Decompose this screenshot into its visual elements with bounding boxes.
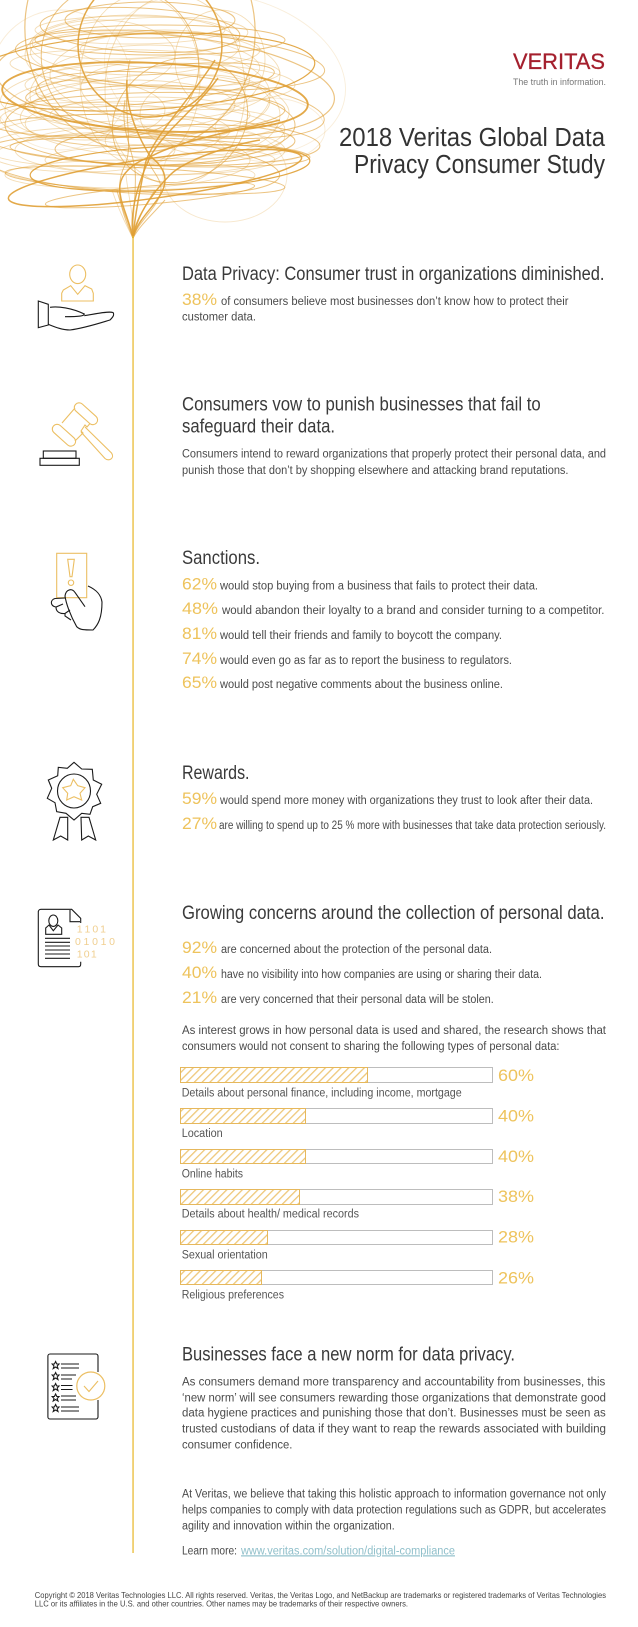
logo tagline: The truth in information. — [513, 77, 606, 87]
learn more link: Learn more: — [182, 1545, 237, 1557]
text block: data hygiene practices and punishing those that don’t. Businesses must be seen as — [182, 1408, 606, 1420]
heading: Businesses face a new norm for data privacy. — [182, 1345, 515, 1366]
panel: consumer trust — [38, 264, 605, 330]
text block: consumer confidence. — [182, 1440, 292, 1452]
text block: As consumers demand more transparency and accountability from businesses, this — [182, 1377, 606, 1389]
stat: 38%: 38% — [182, 291, 217, 309]
bar: sexual orientation 28%: Sexual orientation — [182, 1250, 268, 1262]
stat: 65% — [182, 674, 503, 692]
bar: health records 38%: 38% — [498, 1188, 534, 1206]
stat: 81%: 81% — [182, 625, 217, 643]
text block: veritas statement: agility and innovation within the organization. — [182, 1520, 395, 1532]
logo wordmark: VERITAS — [513, 49, 605, 74]
stat: 74%: 74% — [182, 650, 217, 668]
stat: 59%: would spend more money with organizations they trust to look after their data. — [219, 795, 593, 807]
icon: checklist with check badge — [48, 1354, 105, 1419]
icon: hand holding warning card — [51, 553, 102, 630]
stat: 81%: would tell their friends and family to boycott the company. — [219, 630, 502, 642]
panel: sanctions — [51, 548, 605, 692]
bar: religious preferences 26% — [180, 1270, 534, 1302]
stat: 65%: 65% — [182, 674, 217, 692]
icon: personal data document: 0 1 0 1 0 — [75, 936, 115, 948]
bar: personal finance 60% — [180, 1067, 534, 1100]
stat: 40% — [182, 964, 542, 982]
stat: 81% — [182, 625, 502, 643]
text block: veritas statement — [182, 1488, 606, 1532]
heading — [182, 395, 541, 438]
stat: 48% — [182, 600, 604, 618]
icon: personal data document — [38, 909, 115, 967]
text block — [182, 1377, 606, 1452]
stat: 27%: 27% — [182, 815, 217, 833]
heading: safeguard their data. — [182, 417, 335, 438]
panel: new norm — [48, 1345, 606, 1557]
bar: personal finance 60%: Details about personal finance, including income, mortgage — [182, 1088, 462, 1100]
tornado of tangled data lines — [0, 0, 361, 238]
title: 2018 Veritas Global Data — [339, 124, 606, 152]
stat: 48%: 48% — [182, 600, 218, 618]
stat: 92%: are concerned about the protection of the personal data. — [221, 944, 492, 956]
bar: location 40% — [180, 1108, 534, 1140]
bar: religious preferences 26%: Religious preferences — [182, 1290, 284, 1302]
stat: 40%: have no visibility into how companies are using or sharing their data. — [221, 969, 542, 981]
icon: gavel — [40, 401, 113, 465]
footer copyright — [35, 1591, 606, 1609]
icon: hand holding person — [38, 265, 114, 330]
panel: growing concerns — [38, 903, 607, 1302]
stat: 21% — [182, 989, 494, 1007]
stat: 92%: 92% — [182, 939, 217, 957]
footer copyright: Copyright © 2018 Veritas Technologies LLC. All rights reserved. Veritas, the Veritas Logo, and NetBackup are trademarks or registered trademarks of Veritas Technologies — [35, 1591, 606, 1600]
icon: personal data document: 1 1 0 1 — [77, 923, 106, 935]
stat: 38%: customer data. — [182, 312, 256, 324]
stat: 62%: 62% — [182, 575, 217, 593]
text block: ‘new norm’ will see consumers rewarding those organizations that demonstrate good — [182, 1393, 606, 1405]
stat: 92% — [182, 939, 492, 957]
icon: personal data document: 1 0 1 — [77, 948, 97, 960]
footer copyright: LLC or its affiliates in the U.S. and other countries. Other names may be trademarks of their respective owners. — [35, 1600, 408, 1609]
heading: Sanctions. — [182, 548, 260, 569]
bar: location 40%: Location — [182, 1128, 223, 1140]
bar: online habits 40% — [180, 1148, 534, 1181]
stat: 38%: of consumers believe most businesses don’t know how to protect their — [221, 296, 569, 308]
stat: 38% — [182, 291, 569, 324]
bar: location 40%: 40% — [498, 1108, 534, 1126]
stat: 21%: 21% — [182, 989, 217, 1007]
veritas logo — [513, 49, 606, 87]
stat: 62%: would stop buying from a business that fails to protect their data. — [219, 580, 538, 592]
stat: 74% — [182, 650, 512, 668]
stat: 59%: 59% — [182, 790, 217, 808]
stat: 62% — [182, 575, 538, 593]
stat: 40%: 40% — [182, 964, 217, 982]
panel: punish businesses — [40, 395, 606, 477]
stat: 65%: would post negative comments about the business online. — [219, 679, 503, 691]
text block: veritas statement: helps companies to comply with data protection regulations such as GDPR, but accelerates — [182, 1504, 606, 1516]
bar: health records 38% — [180, 1188, 534, 1221]
stat: 59% — [182, 790, 593, 808]
bar: religious preferences 26%: 26% — [498, 1270, 534, 1288]
icon: award rosette — [47, 762, 102, 840]
bar: sexual orientation 28% — [180, 1229, 534, 1262]
text block: trusted custodians of data if they want to reap the rewards associated with building — [182, 1424, 606, 1436]
title — [339, 124, 606, 179]
bar: health records 38%: Details about health/ medical records — [182, 1209, 359, 1221]
central timeline stem — [132, 236, 134, 1553]
text block — [182, 448, 606, 477]
bar: sexual orientation 28%: 28% — [498, 1229, 534, 1247]
text block: Consumers intend to reward organizations that properly protect their personal data, and — [182, 448, 606, 460]
panel: rewards — [47, 762, 606, 840]
stat: 27% — [182, 815, 606, 833]
text block: As interest grows in how personal data is used and shared, the research shows that — [182, 1025, 607, 1037]
text block: punish those that don’t by shopping elsewhere and attacking brand reputations. — [182, 465, 568, 477]
bar chart — [180, 1067, 534, 1302]
bar: online habits 40%: Online habits — [182, 1169, 243, 1181]
title: Privacy Consumer Study — [354, 151, 605, 179]
stat: 48%: would abandon their loyalty to a brand and consider turning to a competitor. — [221, 605, 604, 617]
heading: Rewards. — [182, 763, 250, 784]
stat: 74%: would even go as far as to report the business to regulators. — [219, 655, 512, 667]
heading: Consumers vow to punish businesses that fail to — [182, 395, 541, 416]
bar: personal finance 60%: 60% — [498, 1067, 534, 1085]
bar: online habits 40%: 40% — [498, 1148, 534, 1166]
text block: consumers would not consent to sharing the following types of personal data: — [182, 1041, 560, 1053]
text block: veritas statement: At Veritas, we believe that taking this holistic approach to information governance not only — [182, 1488, 606, 1500]
stat: 21%: are very concerned that their personal data will be stolen. — [221, 994, 494, 1006]
text block — [182, 1025, 607, 1053]
learn more link: www.veritas.com/solution/digital-compliance — [240, 1545, 455, 1557]
